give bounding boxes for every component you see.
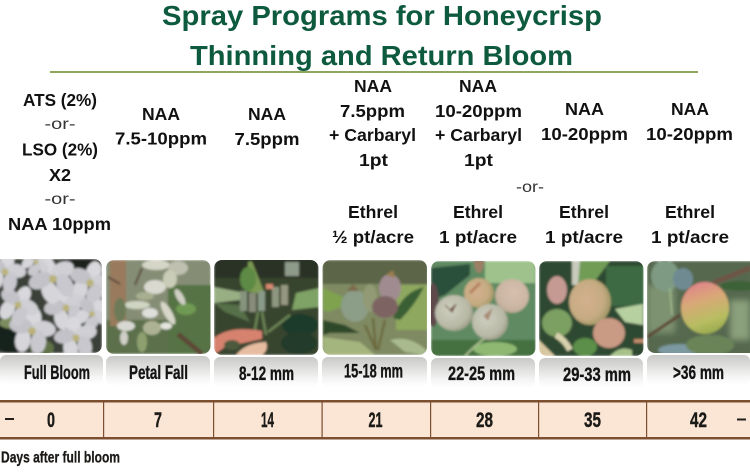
spray column: 29-33 mm: Ethrel [559, 202, 609, 222]
spray column: 29-33 mm: 10-20ppm [541, 124, 628, 144]
spray column: 8-12 mm: NAA [248, 104, 286, 124]
spray column: over 36 mm [646, 99, 733, 247]
spray column: 22-25 mm: + Carbaryl [435, 125, 522, 145]
title [162, 0, 602, 71]
timeline: days after full bloom: 28 [476, 409, 493, 432]
spray column: 22-25 mm [435, 76, 522, 247]
timeline: days after full bloom [0, 400, 750, 440]
stage labels: Petal Fall [129, 362, 188, 384]
stage labels: 8-12 mm [239, 363, 294, 385]
spray column: 22-25 mm: 10-20ppm [435, 101, 522, 121]
spray column: 8-12 mm [234, 104, 300, 149]
spray column: full bloom: -or- [44, 191, 76, 208]
spray column: over 36 mm: 10-20ppm [646, 124, 733, 144]
spray column: 15-18 mm [329, 76, 416, 247]
stage labels: 15-18 mm [344, 360, 403, 382]
photo: 29-33 mm fruitlets [539, 261, 644, 356]
photo: 22-25 mm fruitlets [431, 261, 536, 356]
stage labels: 22-25 mm [448, 363, 515, 385]
spray column: full bloom: X2 [49, 165, 71, 185]
spray column: full bloom: -or- [44, 116, 76, 133]
spray column: 15-18 mm: + Carbaryl [329, 125, 416, 145]
spray column: 29-33 mm [541, 99, 628, 247]
stage labels: >36 mm [673, 362, 724, 384]
photo: petal fall blossoms [106, 260, 212, 354]
timeline: days after full bloom: 0 [47, 409, 55, 432]
spray column: petal fall: NAA [142, 104, 180, 124]
stage labels: Full Bloom [24, 362, 90, 384]
timeline: days after full bloom: 7 [154, 409, 162, 432]
spray column: over 36 mm: NAA [671, 99, 709, 119]
photo: full bloom blossoms [0, 259, 102, 353]
timeline: days after full bloom: 35 [584, 409, 601, 432]
title: Thinning and Return Bloom [190, 40, 573, 71]
spray column: 15-18 mm: 1pt [359, 150, 388, 170]
spray column: 22-25 mm: NAA [459, 76, 497, 96]
stage labels [24, 360, 724, 386]
stage labels: 29-33 mm [563, 364, 631, 386]
spray column: full bloom [8, 90, 111, 234]
spray column: 29-33 mm: NAA [565, 99, 604, 119]
timeline: days after full bloom: 42 [690, 409, 707, 432]
photo: 15-18 mm fruitlets [322, 260, 428, 355]
spray column: 8-12 mm: 7.5ppm [234, 129, 300, 149]
spray column: 22-25 mm: Ethrel [453, 202, 503, 222]
spray column: over 36 mm: Ethrel [665, 202, 715, 222]
spray column: full bloom: LSO (2%) [22, 140, 98, 160]
spray column: over 36 mm: 1 pt/acre [651, 227, 729, 247]
or separator: -or- [516, 179, 544, 196]
spray column: 29-33 mm: 1 pt/acre [545, 227, 623, 247]
spray column: petal fall: 7.5-10ppm [115, 128, 207, 148]
spray column: petal fall [115, 104, 207, 148]
timeline: days after full bloom: 21 [368, 409, 383, 432]
reflections under photos [0, 355, 750, 388]
axis caption: Days after full bloom [1, 450, 120, 466]
photo: over 36 mm apple [647, 260, 750, 356]
spray column: 22-25 mm: 1pt [464, 150, 493, 170]
photo: 8-12 mm fruitlets [214, 258, 319, 355]
spray column: 15-18 mm: ½ pt/acre [332, 227, 414, 247]
spray column: 15-18 mm: 7.5ppm [340, 101, 405, 121]
spray column: 15-18 mm: Ethrel [348, 202, 398, 222]
title: Spray Programs for Honeycrisp [162, 0, 602, 31]
spray column: full bloom: NAA 10ppm [8, 214, 111, 234]
timeline: days after full bloom: 14 [261, 409, 274, 432]
spray column: full bloom: ATS (2%) [23, 90, 97, 110]
spray column: 22-25 mm: 1 pt/acre [439, 227, 517, 247]
spray column: 15-18 mm: NAA [354, 76, 392, 96]
